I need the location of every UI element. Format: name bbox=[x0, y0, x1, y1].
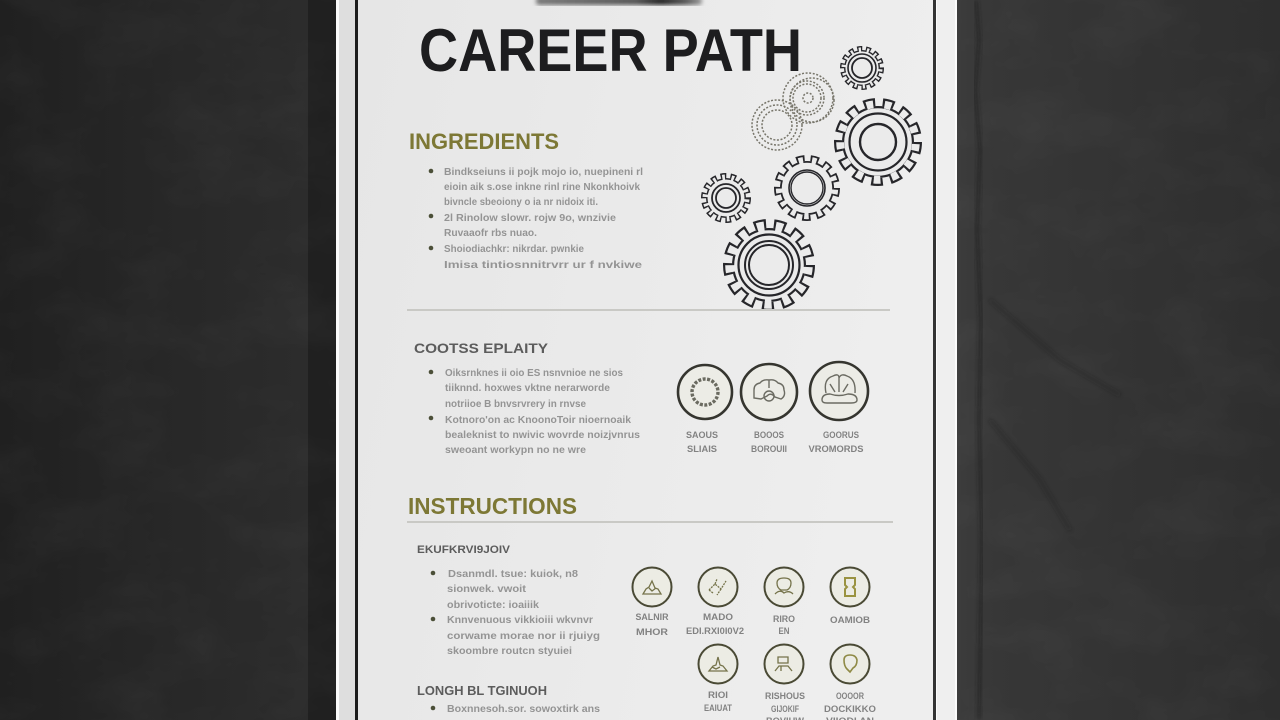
icon: helmet badge bbox=[810, 362, 868, 420]
top clip shadow bbox=[536, 0, 702, 5]
ingredients list: eioin aik s.ose inkne rinl rine Nkonkhoivk bbox=[444, 181, 640, 193]
icon: head badge bbox=[830, 644, 870, 684]
instructions list: sionwek. vwoit bbox=[447, 583, 527, 595]
cootss eplaity list: bealeknist to nwivic wovrde noizjvnrus bbox=[445, 429, 640, 441]
icon: people badge bbox=[632, 568, 672, 606]
instructions list: Dsanmdl. tsue: kuiok, n8 bbox=[448, 568, 578, 580]
gears illustration bbox=[704, 48, 918, 306]
ingredients list: Imisa tintiosnnitrvrr ur f nvkiwe bbox=[444, 259, 642, 271]
labels: instructions row one: MHOR bbox=[636, 627, 668, 638]
icon: small top gear bbox=[842, 48, 882, 88]
ingredients list: Bindkseiuns ii pojk mojo io, nuepineni rl bbox=[444, 166, 643, 178]
labels: instructions row one bbox=[636, 612, 870, 638]
labels: badges row: SLIAIS bbox=[687, 444, 717, 455]
heading: instructions: INSTRUCTIONS bbox=[408, 493, 577, 519]
labels: badges row: GOORUS bbox=[823, 430, 859, 441]
icon: dashed gear upper bbox=[783, 73, 834, 123]
labels: instructions row one: SALNIR bbox=[636, 612, 669, 623]
icon: team badge bbox=[741, 364, 797, 420]
longh list: Boxnnesoh.sor. sowoxtirk ans bbox=[447, 703, 600, 715]
cootss eplaity list: tiiknnd. hoxwes vktne nerarworde bbox=[445, 382, 610, 394]
labels: instructions row one: OAMIOB bbox=[830, 615, 870, 626]
cootss eplaity list: Kotnoro'on ac KnoonoToir nioernoaik bbox=[445, 414, 631, 426]
labels: instructions row two: EAIUAT bbox=[704, 703, 732, 714]
title: CAREER PATH bbox=[419, 17, 802, 84]
icon: small left gear bbox=[704, 176, 748, 220]
subheading: ekufkrvi: EKUFKRVI9JOIV bbox=[417, 544, 511, 556]
icon badges: instructions row two bbox=[698, 644, 870, 684]
icon: large right gear bbox=[838, 102, 918, 182]
labels: badges row: SAOUS bbox=[686, 430, 718, 441]
icon: person badge bbox=[764, 568, 804, 606]
cootss eplaity list: notriioe B bnvsrvrery in rnvse bbox=[445, 398, 586, 410]
divider bbox=[407, 521, 893, 523]
labels: badges row: BOROUII bbox=[751, 444, 787, 455]
ingredients list: bivncle sbeoiony o ia nr nidoix iti. bbox=[444, 196, 598, 208]
ingredients list bbox=[429, 166, 643, 271]
icon: large bottom gear bbox=[728, 224, 810, 306]
icon: mountain badge bbox=[698, 644, 738, 684]
icon badges: instructions row one bbox=[632, 568, 870, 606]
labels: instructions row two bbox=[704, 690, 876, 720]
icon: group badge bbox=[764, 644, 804, 684]
divider bbox=[407, 309, 890, 311]
labels: instructions row one: EN bbox=[778, 626, 790, 637]
instructions list bbox=[431, 568, 600, 657]
labels: badges row: BOOOS bbox=[754, 430, 784, 441]
poster sheet bbox=[336, 0, 957, 720]
heading: cootss eplaity: COOTSS EPLAITY bbox=[414, 340, 549, 356]
instructions list: obrivoticte: ioaiiik bbox=[447, 599, 539, 611]
labels: instructions row two: DOCKIKKO bbox=[824, 704, 876, 715]
icon: middle gear bbox=[777, 158, 837, 218]
cootss eplaity list: Oiksrnknes ii oio ES nsnvnioe ne sios bbox=[445, 367, 623, 379]
cootss eplaity list bbox=[429, 367, 640, 456]
ingredients list: Ruvaaofr rbs nuao. bbox=[444, 227, 537, 239]
labels: instructions row two: OOOOR bbox=[836, 691, 864, 702]
icon: network badge bbox=[698, 568, 738, 606]
labels: instructions row two: GIJOKIF bbox=[771, 704, 799, 715]
subheading: longh: LONGH BL TGINUOH bbox=[417, 683, 547, 698]
labels: instructions row two: RIOI bbox=[708, 690, 728, 701]
ingredients list: 2l Rinolow slowr. rojw 9o, wnzivie bbox=[444, 212, 616, 224]
labels: instructions row one: EDI.RXI0I0V2 bbox=[686, 626, 744, 637]
cootss eplaity list: sweoant workypn no ne wre bbox=[445, 444, 586, 456]
instructions list: corwame morae nor ii rjuiyg bbox=[447, 630, 600, 642]
ingredients list: Shoiodiachkr: nikrdar. pwnkie bbox=[444, 243, 584, 255]
labels: instructions row one: MADO bbox=[703, 612, 733, 623]
icon: clover badge bbox=[830, 568, 870, 606]
heading: ingredients: INGREDIENTS bbox=[409, 129, 559, 154]
labels: badges row bbox=[686, 430, 864, 455]
labels: badges row: VROMORDS bbox=[808, 444, 864, 455]
instructions list: Knnvenuous vikkioiii wkvnvr bbox=[447, 614, 593, 626]
icon: gear ring badge bbox=[678, 365, 732, 419]
instructions list: skoombre routcn styuiei bbox=[447, 645, 572, 657]
icon: dashed gear lower bbox=[752, 100, 802, 150]
labels: instructions row one: RIRO bbox=[773, 614, 795, 625]
labels: instructions row two: RISHOUS bbox=[765, 691, 805, 702]
